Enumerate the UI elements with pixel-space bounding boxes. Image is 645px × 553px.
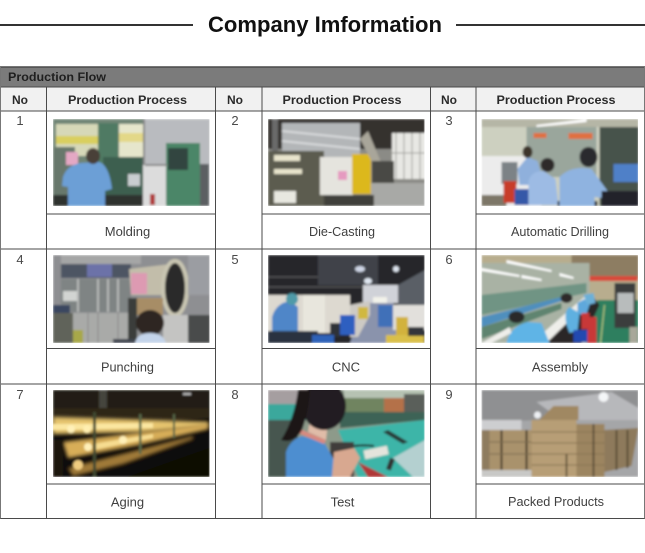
cell 1: Molding: 1 (16, 113, 24, 128)
cell 6: Assembly (445, 252, 638, 374)
table header row: Production Process (68, 93, 187, 107)
cell 3: Automatic Drilling (445, 113, 638, 239)
label: Aging: Aging (111, 494, 144, 510)
photo: assembly (482, 255, 638, 343)
table header row: Production Process (496, 93, 616, 107)
table header row (0, 87, 645, 111)
photo: aging (53, 390, 210, 477)
cell 5: CNC (231, 252, 425, 374)
photo: CNC (268, 255, 425, 343)
cell 8: Test: 8 (231, 387, 239, 402)
label: Assembly: Assembly (532, 360, 589, 374)
label: CNC: CNC (332, 360, 360, 374)
label: Packed Products: Packed Products (508, 494, 604, 509)
cell 9: Packed Products: 9 (445, 387, 453, 402)
label: Test: Test (331, 494, 355, 510)
cell 6: Assembly: 6 (445, 252, 453, 267)
photo: automatic drilling (482, 119, 638, 206)
photo: punching (53, 255, 210, 343)
photo: molding (53, 119, 210, 206)
cell 7: Aging: 7 (16, 387, 24, 402)
cell 8: Test (231, 382, 425, 510)
section band: Production Flow: Production Flow (8, 70, 107, 84)
title: Company Imformation (208, 12, 442, 37)
cell 3: Automatic Drilling: 3 (445, 113, 453, 128)
section band: Production Flow (0, 67, 645, 87)
table header row: No (441, 93, 457, 107)
cell 2: Die-Casting: 2 (231, 113, 239, 128)
label: Die-Casting: Die-Casting (309, 224, 375, 239)
label: Automatic Drilling: Automatic Drilling (511, 224, 609, 239)
photo: die-casting (268, 119, 425, 206)
photo: packed products (482, 390, 638, 477)
cell 7: Aging (16, 387, 210, 510)
cell 4: Punching: 4 (16, 252, 24, 267)
label: Molding: Molding (105, 224, 150, 239)
cell 4: Punching (16, 252, 210, 374)
table header row: Production Process (282, 93, 402, 107)
cell 9: Packed Products (445, 387, 638, 509)
cell 5: CNC: 5 (231, 252, 239, 267)
table header row: No (227, 93, 243, 107)
cell 2: Die-Casting (231, 113, 425, 239)
label: Punching: Punching (101, 360, 154, 374)
cell 1: Molding (16, 113, 210, 239)
photo: test (268, 382, 425, 477)
table header row: No (12, 93, 28, 107)
